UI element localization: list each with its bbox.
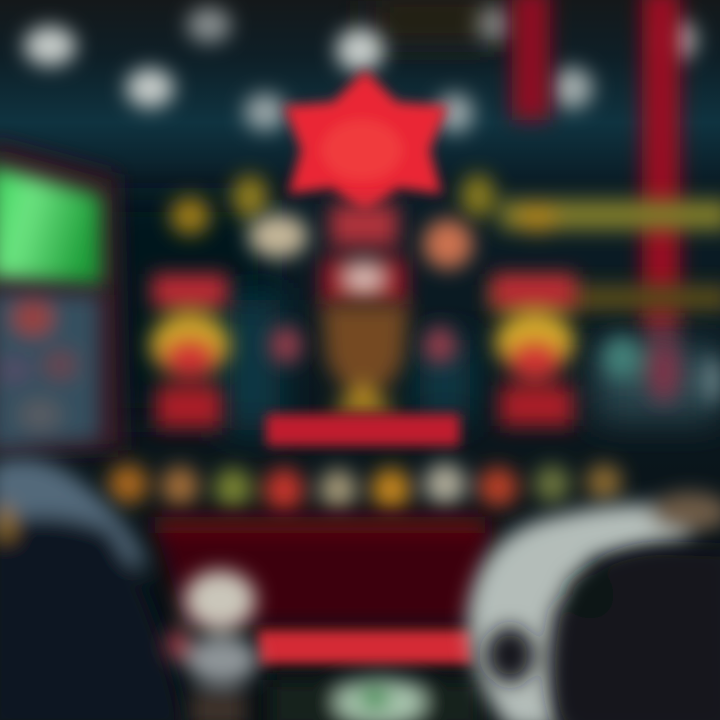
red star [284, 70, 448, 214]
bottom floor [270, 678, 480, 720]
right lantern [492, 274, 576, 426]
ceiling texture [100, 0, 500, 430]
central red plaque [266, 414, 460, 446]
right spectator [468, 492, 720, 720]
right side teal device [595, 345, 720, 420]
dark red stage [155, 516, 495, 625]
right spectator dark hair [486, 548, 720, 720]
gold banners [170, 174, 720, 311]
left screen frame [0, 140, 125, 455]
row of coloured tokens [108, 463, 622, 512]
flanking blossoms [248, 214, 473, 364]
small white-capped figure [166, 570, 258, 720]
star pedestal and cap [322, 204, 406, 304]
hanging red ribbons [512, 0, 680, 400]
ceiling lights [24, 6, 697, 133]
right side device details [602, 336, 720, 404]
left spectator [0, 458, 185, 720]
left lantern [150, 274, 230, 428]
left lower display [0, 292, 100, 450]
bright red step [258, 630, 474, 664]
left green screen [0, 165, 102, 285]
central figure [322, 304, 408, 414]
